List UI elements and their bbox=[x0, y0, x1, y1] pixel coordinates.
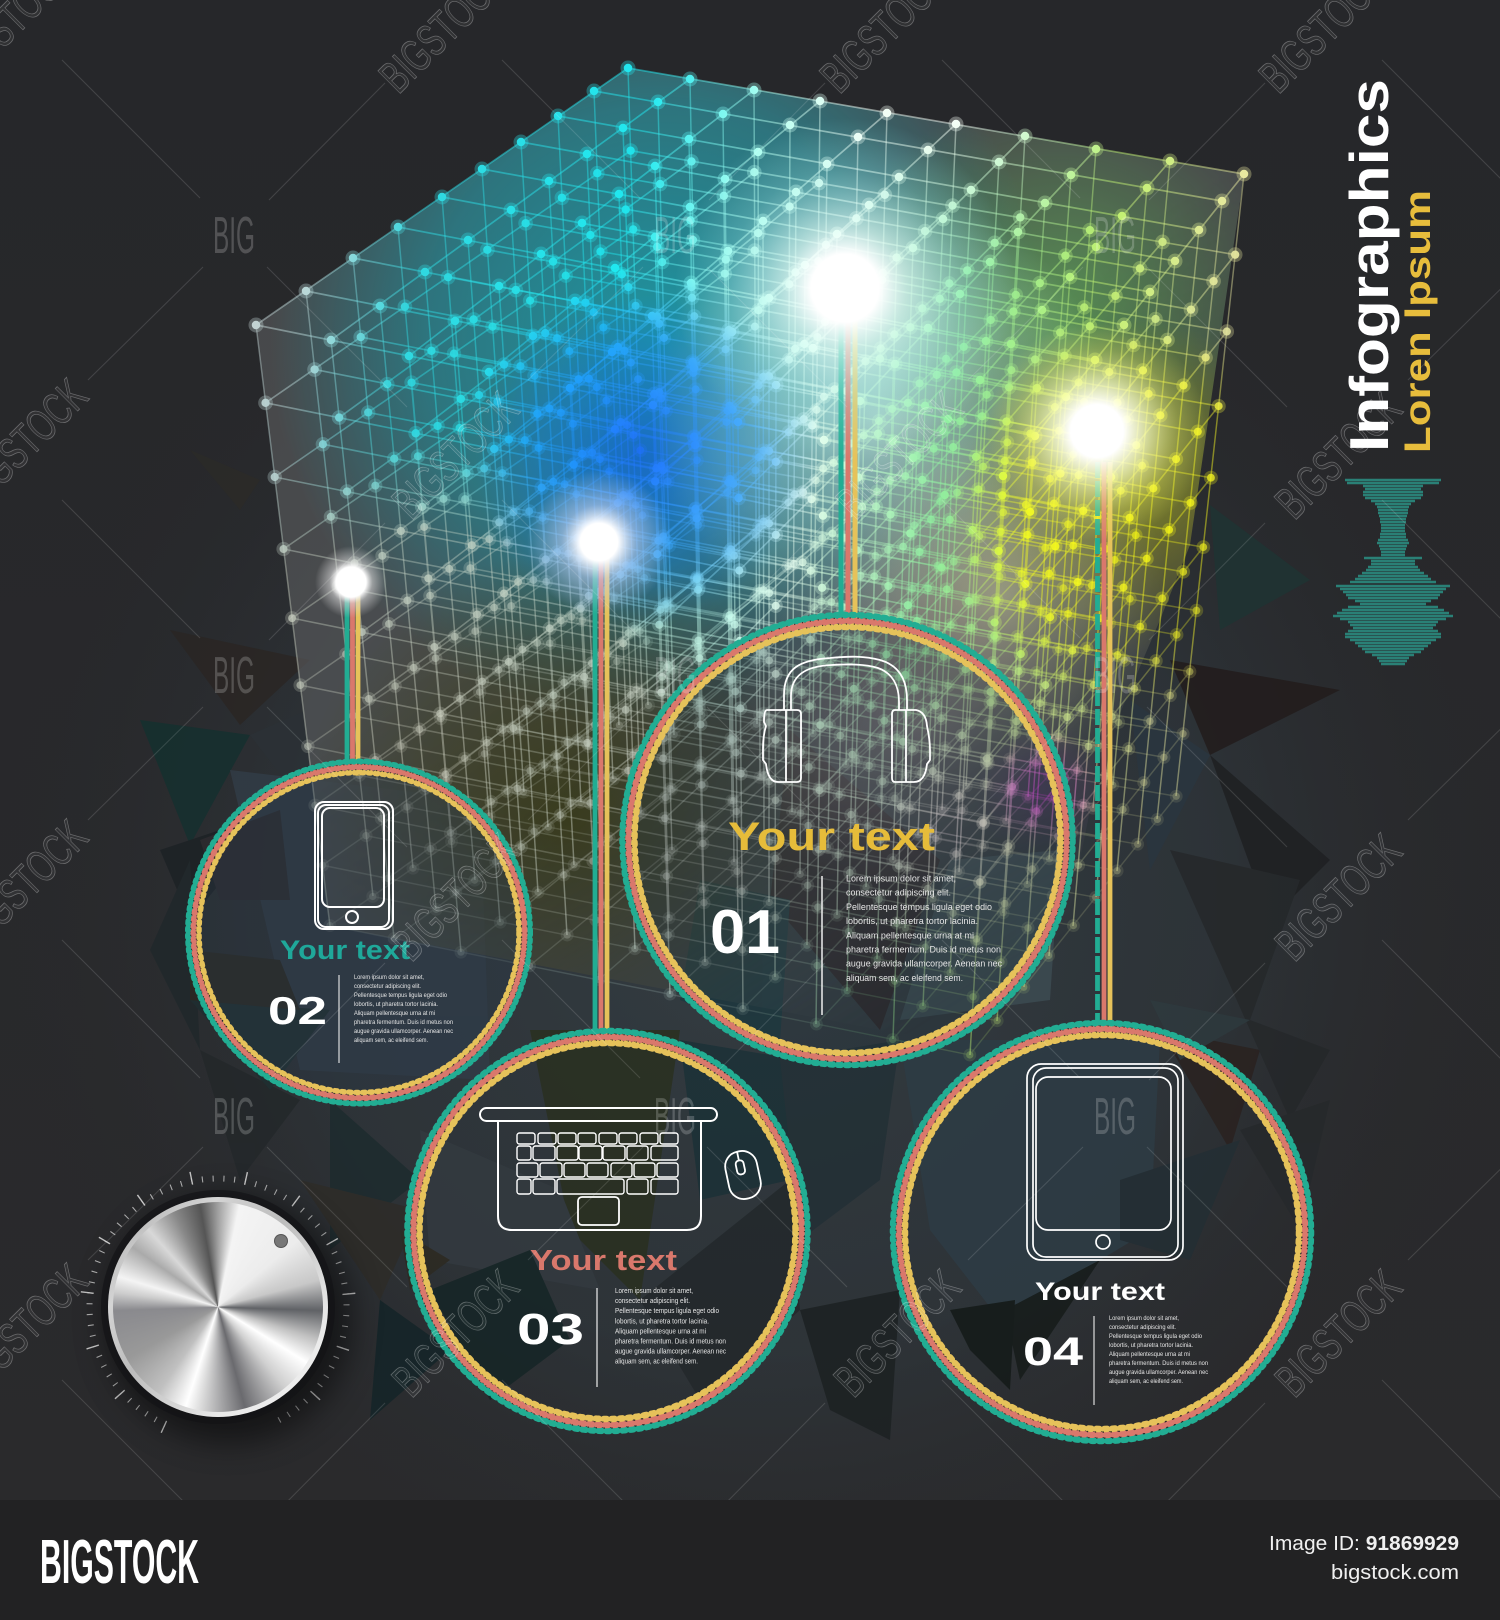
text block: circle 02: Aliquam pellentesque urna at mi bbox=[354, 1010, 435, 1017]
text block: circle 03: consectetur adipiscing elit. bbox=[615, 1298, 690, 1305]
watermark: BIG tiles: BIG bbox=[213, 647, 255, 705]
divider: circle 03 bbox=[596, 1288, 598, 1387]
light: circle 02 bbox=[315, 546, 387, 618]
ring panel: circle 03 bbox=[408, 1031, 808, 1431]
text block: circle 04: aliquam sem, ac eleifend sem. bbox=[1109, 1378, 1183, 1385]
ring panel: circle 04 bbox=[893, 1023, 1311, 1441]
title: circle 02: Your text bbox=[280, 935, 410, 965]
text block: circle 04: pharetra fermentum. Duis id metus non bbox=[1109, 1360, 1209, 1367]
text block: circle 04: Pellentesque tempus ligula eget odio bbox=[1109, 1333, 1203, 1340]
text block: circle 02: consectetur adipiscing elit. bbox=[354, 983, 421, 990]
text block: circle 04: Aliquam pellentesque urna at mi bbox=[1109, 1351, 1190, 1358]
icon: laptop and mouse bbox=[480, 1108, 764, 1230]
icon: smartphone bbox=[315, 802, 393, 929]
watermark: BIGSTOCK diagonals: BIGSTOCK bbox=[382, 1260, 528, 1406]
text block: circle 01: augue gravida ullamcorper. Aenean nec bbox=[846, 959, 1002, 970]
stem: circle 03 bbox=[595, 555, 607, 1045]
text block: circle 03: augue gravida ullamcorper. Aenean nec bbox=[615, 1349, 727, 1356]
text block: circle 01: pharetra fermentum. Duis id metus non bbox=[846, 944, 1001, 956]
text block: circle 01: aliquam sem, ac eleifend sem. bbox=[846, 973, 963, 984]
number: 03: 03 bbox=[517, 1305, 584, 1354]
text block: circle 03: Lorem ipsum dolor sit amet, bbox=[615, 1288, 693, 1295]
metal dial knob bbox=[108, 1197, 328, 1417]
text block: circle 01 bbox=[846, 874, 1002, 984]
text block: circle 01: lobortis, ut pharetra tortor lacinia. bbox=[846, 916, 978, 927]
watermark: BIG tiles: BIG bbox=[654, 1088, 696, 1146]
heading: Infographics: Infographics bbox=[1338, 79, 1400, 452]
text block: circle 04: Lorem ipsum dolor sit amet, bbox=[1109, 1315, 1179, 1322]
divider: circle 02 bbox=[338, 975, 340, 1063]
watermark: BIGSTOCK diagonals: BIGSTOCK bbox=[826, 382, 972, 528]
number: 01: 01 bbox=[710, 898, 780, 967]
footer url: bigstock.com bbox=[1331, 1562, 1459, 1584]
text block: circle 04: lobortis, ut pharetra tortor lacinia. bbox=[1109, 1342, 1193, 1349]
stem: circle 01 bbox=[841, 320, 855, 629]
watermark: BIGSTOCK diagonals: BIGSTOCK bbox=[1265, 1260, 1411, 1406]
text block: circle 03: Pellentesque tempus ligula eget odio bbox=[615, 1308, 719, 1315]
text block: circle 01: consectetur adipiscing elit. bbox=[846, 888, 951, 899]
text block: circle 02 bbox=[354, 974, 454, 1044]
text block: circle 01: Pellentesque tempus ligula eget odio bbox=[846, 902, 992, 913]
stem: circle 04 bbox=[1098, 462, 1110, 1037]
watermark: BIG tiles: BIG bbox=[654, 207, 696, 265]
low-poly background mesh bbox=[140, 450, 1340, 1440]
subheading: Loren Ipsum: Loren Ipsum bbox=[1397, 190, 1438, 453]
watermark: BIGSTOCK diagonals: BIGSTOCK bbox=[1265, 382, 1411, 528]
divider: circle 01 bbox=[821, 876, 823, 1015]
watermark: BIGSTOCK diagonals: BIGSTOCK bbox=[824, 1260, 970, 1406]
text block: circle 04: consectetur adipiscing elit. bbox=[1109, 1324, 1176, 1331]
light: circle 03 bbox=[527, 470, 671, 614]
text block: circle 03: aliquam sem, ac eleifend sem. bbox=[615, 1359, 698, 1366]
ring panel: circle 01 bbox=[622, 615, 1072, 1065]
text block: circle 02: pharetra fermentum. Duis id metus non bbox=[354, 1019, 454, 1026]
icon: tablet bbox=[1027, 1064, 1183, 1260]
text block: circle 02: Lorem ipsum dolor sit amet, bbox=[354, 974, 424, 981]
footer bar bbox=[0, 1500, 1500, 1620]
text block: circle 01: Lorem ipsum dolor sit amet, bbox=[846, 874, 956, 884]
text block: circle 03: Aliquam pellentesque urna at mi bbox=[615, 1328, 706, 1335]
stem: circle 02 bbox=[347, 590, 358, 776]
title: circle 01: Your text bbox=[728, 815, 935, 859]
title: circle 03: Your text bbox=[530, 1245, 677, 1277]
watermark: BIGSTOCK diagonals: BIGSTOCK bbox=[1265, 824, 1411, 970]
text block: circle 02: aliquam sem, ac eleifend sem. bbox=[354, 1037, 428, 1044]
text block: circle 03 bbox=[615, 1288, 727, 1366]
title: circle 04: Your text bbox=[1035, 1278, 1166, 1306]
light: circle 01 bbox=[675, 118, 1015, 458]
watermark: BIGSTOCK diagonals: BIGSTOCK bbox=[382, 382, 528, 528]
cube dot lattice bbox=[248, 60, 1252, 1062]
text block: circle 04: augue gravida ullamcorper. Aenean nec bbox=[1109, 1369, 1208, 1376]
icon: headphones bbox=[763, 657, 930, 782]
dial tick marks bbox=[86, 1175, 350, 1427]
footer image id: Image ID: 91869929 bbox=[1269, 1533, 1459, 1555]
text: BIG bbox=[1094, 1088, 1136, 1146]
text: BIG bbox=[1094, 647, 1136, 705]
number: 04: 04 bbox=[1023, 1330, 1084, 1374]
watermark: BIG tiles: BIG bbox=[654, 647, 696, 705]
text block: circle 03: pharetra fermentum. Duis id metus non bbox=[615, 1338, 726, 1346]
watermark: BIG tiles bbox=[213, 207, 1136, 1146]
light: circle 04 bbox=[987, 321, 1207, 541]
text block: circle 04 bbox=[1109, 1315, 1209, 1385]
ring panel: circle 02 bbox=[188, 762, 530, 1104]
text block: circle 03: lobortis, ut pharetra tortor lacinia. bbox=[615, 1318, 709, 1325]
divider: circle 04 bbox=[1093, 1316, 1095, 1405]
text block: circle 02: augue gravida ullamcorper. Aenean nec bbox=[354, 1028, 453, 1035]
text block: circle 02: Pellentesque tempus ligula eget odio bbox=[354, 992, 448, 999]
watermark: BIG tiles: BIG bbox=[213, 1088, 255, 1146]
text: BIGSTOCK bbox=[40, 1528, 199, 1597]
icon: sound waveform bbox=[1333, 480, 1453, 664]
number: 02: 02 bbox=[268, 990, 327, 1033]
cube volume tint bbox=[256, 68, 1243, 998]
text block: circle 01: Aliquam pellentesque urna at mi bbox=[846, 930, 974, 941]
watermark: BIGSTOCK diagonals: BIGSTOCK bbox=[382, 824, 528, 970]
text: BIG bbox=[1094, 207, 1136, 265]
watermark: BIG tiles: BIG bbox=[213, 207, 255, 265]
text block: circle 02: lobortis, ut pharetra tortor lacinia. bbox=[354, 1001, 438, 1008]
